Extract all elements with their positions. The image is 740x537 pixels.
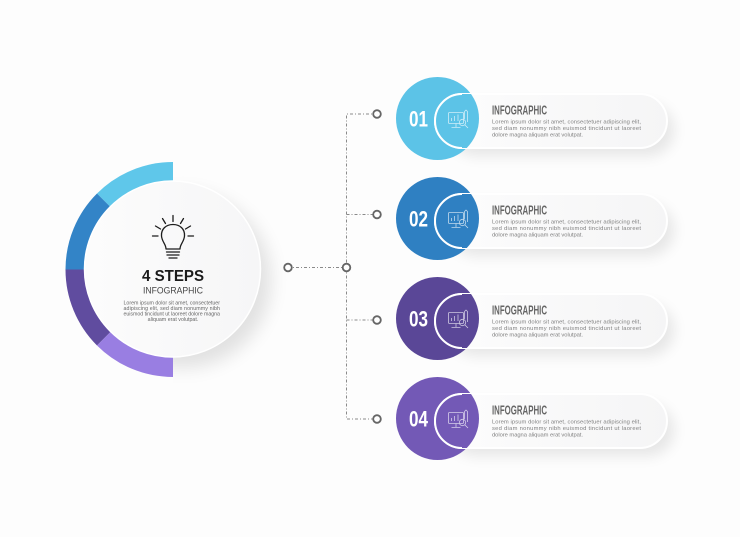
step 1 circle overlap bbox=[436, 94, 479, 148]
connector lines bbox=[288, 114, 377, 419]
description text: adipiscing elit, sed diam nonummy nibh bbox=[124, 306, 220, 312]
step 4 pill bbox=[435, 394, 667, 448]
step 1 text: dolore magna aliquam erat volutpat. bbox=[492, 132, 583, 138]
step 2 number: 02 bbox=[409, 206, 428, 231]
step 2 text bbox=[492, 220, 641, 238]
step 4 text: dolore magna aliquam erat volutpat. bbox=[492, 432, 583, 438]
step 4 bbox=[396, 377, 674, 460]
step 3 circle overlap bbox=[436, 294, 479, 348]
step 4 title: INFOGRAPHIC bbox=[492, 404, 547, 418]
icon: light bulb bbox=[152, 216, 194, 258]
step 3 pill bbox=[435, 294, 667, 348]
connector nodes bbox=[284, 110, 381, 423]
step 3 text bbox=[492, 320, 641, 338]
step 3 bbox=[396, 277, 674, 360]
step 3 pill edge arc bbox=[435, 294, 462, 348]
description text bbox=[124, 300, 220, 323]
step 1 text bbox=[492, 120, 641, 138]
step 2 circle overlap bbox=[436, 194, 479, 248]
step 4 pill shadow bbox=[450, 404, 674, 456]
step 3 title: INFOGRAPHIC bbox=[492, 304, 547, 318]
step 2 text: dolore magna aliquam erat volutpat. bbox=[492, 232, 583, 238]
step 2 circle bbox=[396, 177, 479, 260]
step 3 text: Lorem ipsum dolor sit amet, consectetuer adipiscing elit, bbox=[492, 320, 641, 326]
step 3 pill shadow bbox=[450, 304, 674, 356]
description text: euismod tincidunt ut laoreet dolore magna bbox=[124, 312, 220, 318]
step 1 circle bbox=[396, 77, 479, 160]
step 4 text bbox=[492, 420, 641, 438]
step 3 text: dolore magna aliquam erat volutpat. bbox=[492, 332, 583, 338]
step 2 pill shadow bbox=[450, 204, 674, 256]
main circle panel bbox=[84, 181, 260, 357]
step 4 text: sed diam nonummy nibh euismod tincidunt ut laoreet bbox=[492, 426, 641, 432]
step 4 number: 04 bbox=[409, 406, 429, 431]
step 4 circle overlap bbox=[436, 394, 479, 448]
step 1 text: sed diam nonummy nibh euismod tincidunt ut laoreet bbox=[492, 126, 641, 132]
step 2 title: INFOGRAPHIC bbox=[492, 204, 547, 218]
step 2 text: Lorem ipsum dolor sit amet, consectetuer adipiscing elit, bbox=[492, 220, 641, 226]
step 1 number: 01 bbox=[409, 106, 428, 131]
step 3 number: 03 bbox=[409, 306, 428, 331]
ring: four coloured segments bbox=[66, 162, 173, 377]
step 1 pill shadow bbox=[450, 104, 674, 156]
icon: chart monitor bbox=[448, 410, 468, 428]
step 4 circle bbox=[396, 377, 479, 460]
subheading: infographic: INFOGRAPHIC bbox=[143, 286, 203, 296]
step 1 pill bbox=[435, 94, 667, 148]
step 4 pill edge arc bbox=[435, 394, 462, 448]
step 3 text: sed diam nonummy nibh euismod tincidunt ut laoreet bbox=[492, 326, 641, 332]
step 2 pill edge arc bbox=[435, 194, 462, 248]
step 2 bbox=[396, 177, 674, 260]
step 1 pill edge arc bbox=[435, 94, 462, 148]
icon: chart monitor bbox=[448, 310, 468, 328]
step 3 circle bbox=[396, 277, 479, 360]
description text: aliquam erat volutpat. bbox=[148, 317, 198, 323]
icon: chart monitor bbox=[448, 110, 468, 128]
icon: chart monitor bbox=[448, 210, 468, 228]
description text: Lorem ipsum dolor sit amet, consectetuer bbox=[124, 300, 220, 306]
step 1 bbox=[396, 77, 674, 160]
step 4 text: Lorem ipsum dolor sit amet, consectetuer adipiscing elit, bbox=[492, 420, 641, 426]
step 1 title: INFOGRAPHIC bbox=[492, 104, 547, 118]
heading: 4 STEPS: 4 STEPS bbox=[142, 268, 204, 285]
main circle shadow bbox=[173, 202, 275, 372]
step 1 text: Lorem ipsum dolor sit amet, consectetuer adipiscing elit, bbox=[492, 120, 641, 126]
step 2 text: sed diam nonummy nibh euismod tincidunt ut laoreet bbox=[492, 226, 641, 232]
step 2 pill bbox=[435, 194, 667, 248]
